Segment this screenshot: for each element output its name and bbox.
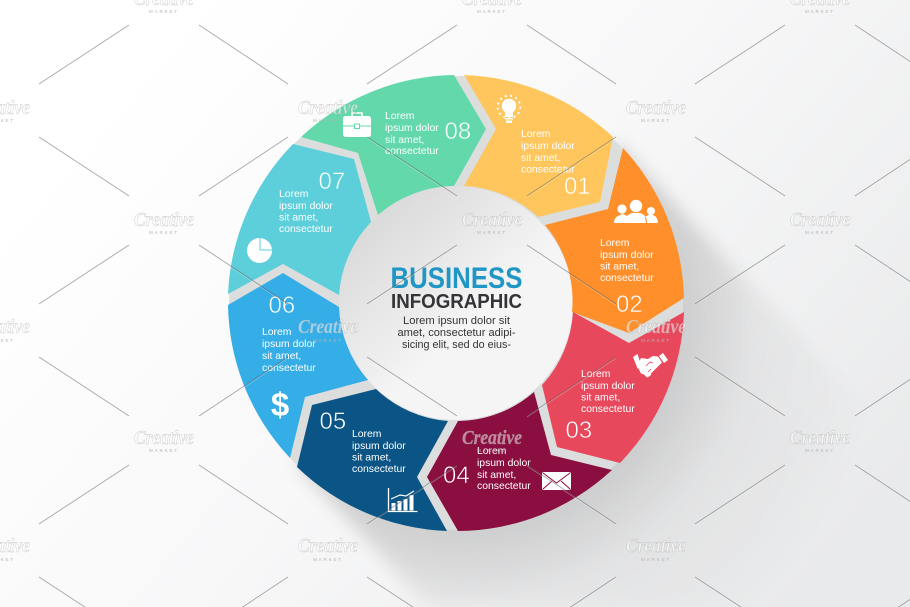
centre disc xyxy=(339,186,573,420)
watermarks: Creative xyxy=(626,535,686,557)
number 07: 07 xyxy=(318,168,345,195)
text 01: Lorem xyxy=(521,129,550,140)
text 01: sit amet, xyxy=(521,153,560,164)
number 02: 02 xyxy=(616,291,643,318)
watermarks: Creative xyxy=(462,209,522,231)
watermarks: Creative xyxy=(134,427,194,449)
text 02: consectetur xyxy=(600,273,654,284)
segment 08: green xyxy=(301,75,486,215)
text 03: consectetur xyxy=(581,404,635,415)
text 01: ipsum dolor xyxy=(521,141,575,152)
number 03: 03 xyxy=(566,417,592,444)
watermarks: Creative xyxy=(626,316,686,338)
text 06: consectetur xyxy=(262,363,316,374)
watermarks: Creative xyxy=(134,209,194,231)
centre body text xyxy=(398,315,516,351)
watermarks: Creative xyxy=(298,316,358,338)
segment 05: navy xyxy=(297,389,448,531)
text 07: ipsum dolor xyxy=(279,201,333,212)
icon: handshake xyxy=(633,353,668,378)
subtitle: infographic: INFOGRAPHIC xyxy=(391,291,522,313)
watermarks: MARKET xyxy=(149,9,179,14)
title: business: BUSINESS xyxy=(390,262,522,295)
watermarks: MARKET xyxy=(149,230,179,235)
icon: bar chart xyxy=(388,488,418,512)
number 01: 01 xyxy=(564,173,591,200)
watermarks: Creative xyxy=(298,97,358,119)
watermarks: MARKET xyxy=(805,9,835,14)
text 03: sit amet, xyxy=(581,392,620,404)
icon: people xyxy=(614,200,658,223)
segment 03: red xyxy=(542,312,684,463)
segment 02: orange xyxy=(545,148,684,333)
text 05: consectetur xyxy=(352,464,406,475)
watermarks: MARKET xyxy=(477,448,507,453)
segment 04: maroon xyxy=(427,392,612,531)
watermarks: MARKET xyxy=(805,448,835,453)
centre heading xyxy=(390,262,522,351)
text 06: sit amet, xyxy=(262,351,301,362)
text 07: Lorem xyxy=(279,189,308,200)
watermarks: MARKET xyxy=(313,118,343,123)
text 05: ipsum dolor xyxy=(352,441,406,452)
text 02: sit amet, xyxy=(600,262,639,272)
watermarks: MARKET xyxy=(641,338,671,343)
watermarks: Creative xyxy=(626,97,686,119)
text 07: consectetur xyxy=(279,224,333,235)
text 06: ipsum dolor xyxy=(262,339,316,350)
watermarks: MARKET xyxy=(313,557,343,562)
long drop shadow of the ring xyxy=(295,142,910,607)
gray ring base visible in the gaps xyxy=(229,76,683,530)
number 08: 08 xyxy=(444,118,471,145)
watermarks: MARKET xyxy=(805,230,835,235)
watermarks: Creative xyxy=(790,209,850,231)
icon: light bulb xyxy=(498,96,520,123)
text 08: Lorem xyxy=(385,111,414,122)
text 01: consectetur xyxy=(521,164,575,176)
watermarks: MARKET xyxy=(477,9,507,14)
text 03: ipsum dolor xyxy=(581,381,635,392)
text 05: sit amet, xyxy=(352,452,391,464)
icon: dollar: $ xyxy=(271,386,289,423)
number 06: 06 xyxy=(268,292,295,319)
segment 07: teal xyxy=(228,144,371,295)
centre body text: amet, consectetur adipi- xyxy=(398,327,516,339)
text 04: sit amet, xyxy=(477,470,516,481)
text 08: sit amet, xyxy=(385,135,424,146)
text 04: consectetur xyxy=(477,481,531,492)
text 05: Lorem xyxy=(352,429,381,440)
text 04: Lorem xyxy=(477,446,506,457)
text 02: ipsum dolor xyxy=(600,250,654,261)
number 05: 05 xyxy=(320,408,346,435)
text 08: consectetur xyxy=(385,146,439,157)
text 03: Lorem xyxy=(581,369,610,380)
icon: pie chart xyxy=(247,238,272,263)
text 07: sit amet, xyxy=(279,212,318,224)
watermarks: Creative xyxy=(298,535,358,557)
icon: briefcase xyxy=(343,113,371,137)
segment 06: blue xyxy=(228,273,368,458)
watermarks: MARKET xyxy=(641,557,671,562)
text 02: Lorem xyxy=(600,238,629,249)
watermarks: MARKET xyxy=(477,230,507,235)
number 04: 04 xyxy=(443,462,470,489)
watermarks: MARKET xyxy=(313,338,343,343)
watermarks: MARKET xyxy=(149,448,179,453)
watermarks: Creative xyxy=(790,427,850,449)
centre body text: sicing elit, sed do eius- xyxy=(402,339,511,351)
centre body text: Lorem ipsum dolor sit xyxy=(403,315,510,327)
icon: envelope xyxy=(542,472,571,490)
watermarks: Creative xyxy=(462,427,522,449)
text 06: Lorem xyxy=(262,327,291,338)
text 04: ipsum dolor xyxy=(477,458,531,469)
segment 01: yellow xyxy=(464,75,613,217)
watermarks: MARKET xyxy=(641,118,671,123)
text 08: ipsum dolor xyxy=(385,123,439,134)
